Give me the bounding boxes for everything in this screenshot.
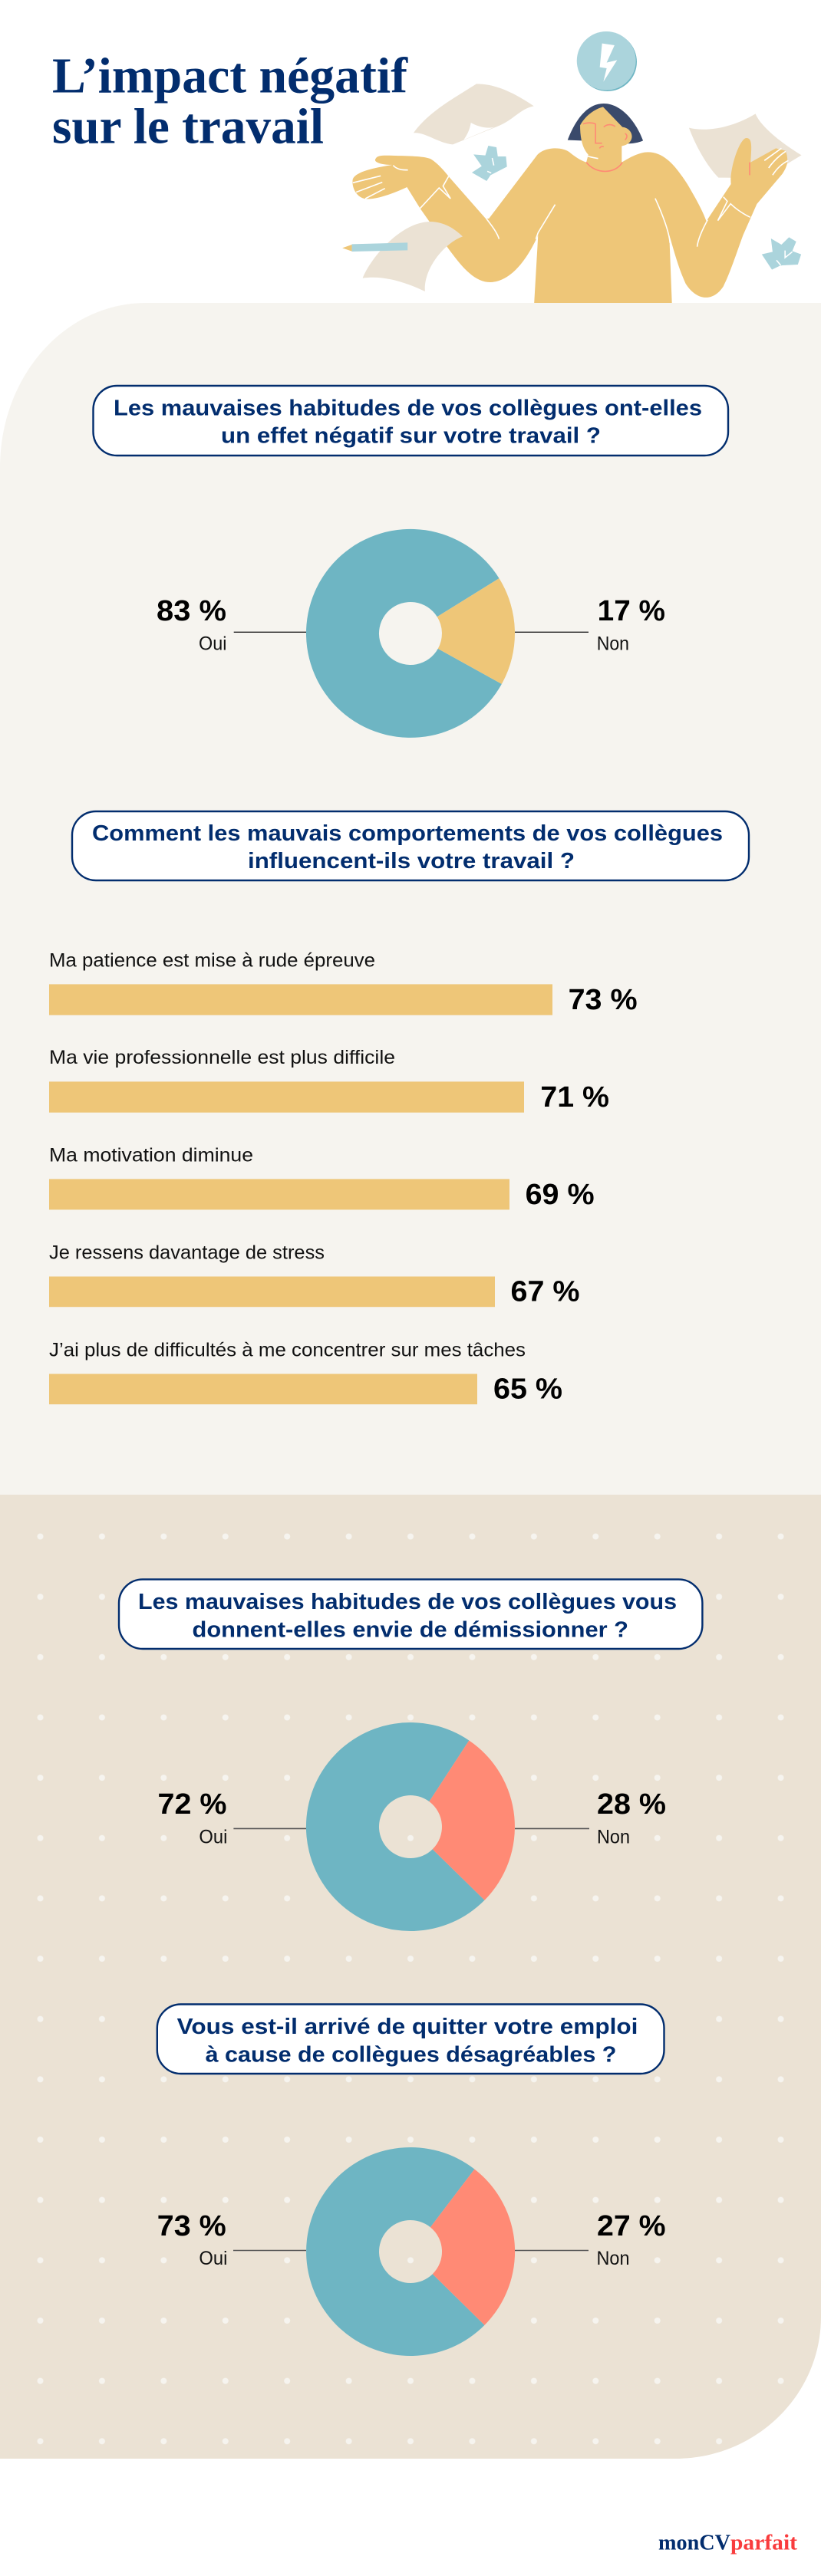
person hair xyxy=(568,104,643,143)
question 1 pill: un effet négatif sur votre travail ? xyxy=(221,423,601,448)
label: 73 % oui xyxy=(157,2210,306,2269)
label: 28 % non: Non xyxy=(597,1827,630,1848)
bar: stress 67 %: Je ressens davantage de stress xyxy=(49,1242,325,1264)
slice: non 28 % xyxy=(429,1741,515,1900)
question 3 pill: Les mauvaises habitudes de vos collègues vous xyxy=(138,1590,677,1614)
question 4 pill xyxy=(157,2005,664,2074)
bar: patience 73 % xyxy=(49,949,638,1016)
label: 17 % non: 17 % xyxy=(598,595,665,627)
icon: flying paper right xyxy=(689,114,802,178)
logo: monCVparfait xyxy=(658,2531,797,2555)
icon: flying paper top left xyxy=(414,84,534,144)
person face details xyxy=(583,123,750,175)
icon: crumpled paper left xyxy=(472,146,507,181)
icon: paper over arm xyxy=(363,222,463,291)
panel: beige dotted section background xyxy=(0,1495,821,2459)
bar: motivation 69 % xyxy=(49,1144,595,1211)
label: 73 % oui: 73 % xyxy=(157,2210,226,2242)
question 2 pill: influencent-ils votre travail ? xyxy=(248,849,575,873)
bar: patience 73 %: Ma patience est mise à rude épreuve xyxy=(49,949,375,971)
bar: stress 67 %: 67 % xyxy=(511,1276,580,1308)
slice: oui 72 % xyxy=(306,1722,485,1931)
label: 17 % non: Non xyxy=(597,633,629,655)
slice: non 17 % xyxy=(437,578,515,684)
slice: oui 83 % xyxy=(306,529,502,738)
label: 83 % oui: Oui xyxy=(199,633,226,655)
question 1 pill xyxy=(94,386,728,456)
label: 83 % oui: 83 % xyxy=(157,595,226,627)
bar: vie professionnelle 71 % xyxy=(49,1047,609,1114)
question 3 pill: donnent-elles envie de démissionner ? xyxy=(192,1617,628,1642)
bar chart xyxy=(49,949,638,1406)
person clothing and hand creases xyxy=(353,148,788,247)
label: 83 % oui xyxy=(157,595,306,655)
label: 28 % non xyxy=(515,1788,666,1848)
bar: stress 67 % xyxy=(49,1242,580,1308)
question 2 pill xyxy=(72,811,749,880)
label: 72 % oui: Oui xyxy=(199,1827,227,1848)
question 2 pill: Comment les mauvais comportements de vos collègues xyxy=(92,821,723,846)
slice: non 27 % xyxy=(430,2169,515,2325)
bar: motivation 69 %: Ma motivation diminue xyxy=(49,1144,253,1166)
label: 72 % oui xyxy=(158,1788,306,1848)
donut chart 1 xyxy=(306,529,515,738)
person body xyxy=(352,138,787,303)
logo: monCVparfait: monCV xyxy=(658,2531,730,2555)
question 4 pill: Vous est-il arrivé de quitter votre emploi xyxy=(177,2015,638,2039)
question 4 pill: à cause de collègues désagréables ? xyxy=(206,2043,616,2068)
label: 17 % non xyxy=(515,595,665,655)
title xyxy=(52,48,408,155)
icon: crumpled paper right xyxy=(762,237,801,270)
bar: motivation 69 %: 69 % xyxy=(526,1179,595,1211)
question 1 pill: Les mauvaises habitudes de vos collègues ont-elles xyxy=(114,396,702,420)
person face xyxy=(580,107,632,165)
bar: vie professionnelle 71 %: 71 % xyxy=(540,1081,609,1114)
label: 27 % non xyxy=(515,2210,666,2269)
icon: lightning bubble xyxy=(577,31,637,91)
label: 27 % non: 27 % xyxy=(597,2210,666,2242)
panel: light section background xyxy=(0,303,821,1495)
title: L’impact négatif xyxy=(52,48,408,104)
label: 27 % non: Non xyxy=(597,2248,629,2269)
illustration: stressed person with flying papers xyxy=(342,31,802,303)
icon: pencil xyxy=(342,242,407,252)
donut chart 4 xyxy=(306,2147,515,2356)
bar: vie professionnelle 71 %: Ma vie professionnelle est plus difficile xyxy=(49,1047,395,1068)
bar: concentration 65 % xyxy=(49,1339,562,1406)
title: sur le travail xyxy=(52,99,324,155)
label: 73 % oui: Oui xyxy=(199,2248,227,2269)
bar: concentration 65 %: 65 % xyxy=(493,1374,562,1406)
label: 72 % oui: 72 % xyxy=(158,1788,227,1821)
bar: concentration 65 %: J’ai plus de difficultés à me concentrer sur mes tâches xyxy=(49,1339,526,1360)
question 3 pill xyxy=(119,1579,702,1649)
label: 28 % non: 28 % xyxy=(597,1788,666,1821)
logo: monCVparfait: parfait xyxy=(730,2531,797,2555)
slice: oui 73 % xyxy=(306,2147,485,2356)
bar: patience 73 %: 73 % xyxy=(569,984,638,1016)
donut chart 3 xyxy=(306,1722,515,1931)
